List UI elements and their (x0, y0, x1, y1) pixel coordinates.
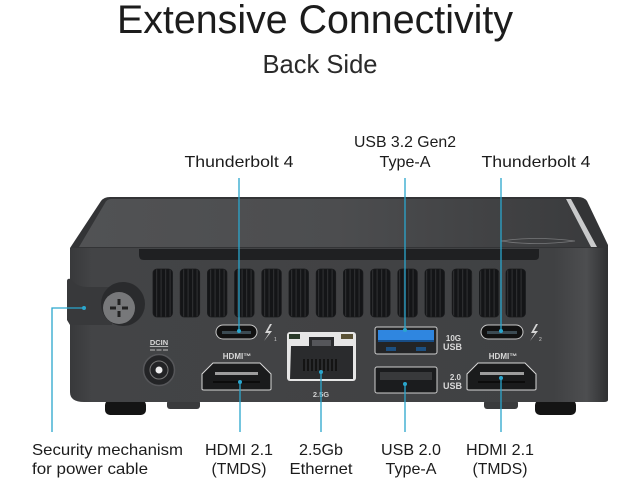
port: USB 3.2: 10G (446, 334, 461, 343)
port: Ethernet: 2.5G (313, 390, 329, 399)
tab: right (484, 400, 518, 409)
port: USB 2.0: 2.0 (450, 373, 462, 382)
label: HDMI 2.1 right: (TMDS) (472, 461, 528, 478)
foot: right (535, 400, 576, 415)
DC input (144, 338, 174, 386)
port: Thunderbolt 4 right: 2 (539, 337, 542, 343)
subtitle: Back Side (262, 49, 378, 79)
label: Thunderbolt 4 right: Thunderbolt 4 (482, 154, 591, 171)
label: HDMI 2.1 left: (TMDS) (212, 461, 266, 478)
label: security mechanism: for power cable (32, 461, 148, 478)
label: security mechanism: Security mechanism (32, 442, 183, 459)
groove (139, 249, 539, 260)
leader lines (52, 178, 501, 432)
port: HDMI right (467, 352, 536, 390)
security bracket and screw (67, 279, 145, 326)
label: USB 3.2 Gen2 Type-A: Type-A (380, 154, 431, 171)
mini PC back side (67, 197, 608, 415)
port: HDMI left: HDMI™ (223, 352, 251, 361)
label: HDMI 2.1 right (466, 442, 534, 478)
port: Thunderbolt 4 left (216, 324, 277, 343)
label: USB 2.0 Type-A: USB 2.0 (381, 442, 441, 459)
label: security mechanism (32, 442, 183, 478)
port: Thunderbolt 4 left: 1 (274, 337, 277, 343)
top face (70, 197, 608, 252)
label: USB 2.0 Type-A (381, 442, 441, 478)
foot: left (105, 400, 146, 415)
label: HDMI 2.1 left (205, 442, 273, 478)
port: HDMI left (202, 352, 271, 390)
labels (32, 134, 591, 478)
DC input: DCIN (150, 338, 168, 347)
vents (153, 269, 526, 317)
label: 2.5Gb Ethernet (290, 442, 353, 478)
label: 2.5Gb Ethernet: Ethernet (290, 461, 353, 478)
port: USB 2.0 (375, 367, 462, 393)
port: Ethernet (287, 332, 356, 399)
port: USB 2.0: USB (443, 381, 462, 391)
port: USB 3.2 (375, 327, 462, 354)
tab: left (167, 400, 200, 409)
label: USB 3.2 Gen2 Type-A: USB 3.2 Gen2 (354, 134, 456, 151)
label: HDMI 2.1 left: HDMI 2.1 (205, 442, 273, 459)
port: Thunderbolt 4 right (481, 324, 542, 343)
label: HDMI 2.1 right: HDMI 2.1 (466, 442, 534, 459)
label: USB 3.2 Gen2 Type-A (354, 134, 456, 171)
front face (70, 248, 608, 402)
port: USB 3.2: USB (443, 342, 462, 352)
leader dots (82, 306, 503, 386)
port: HDMI right: HDMI™ (489, 352, 517, 361)
label: USB 2.0 Type-A: Type-A (386, 461, 437, 478)
label: Thunderbolt 4 left: Thunderbolt 4 (184, 154, 294, 171)
label: 2.5Gb Ethernet: 2.5Gb (299, 442, 343, 459)
